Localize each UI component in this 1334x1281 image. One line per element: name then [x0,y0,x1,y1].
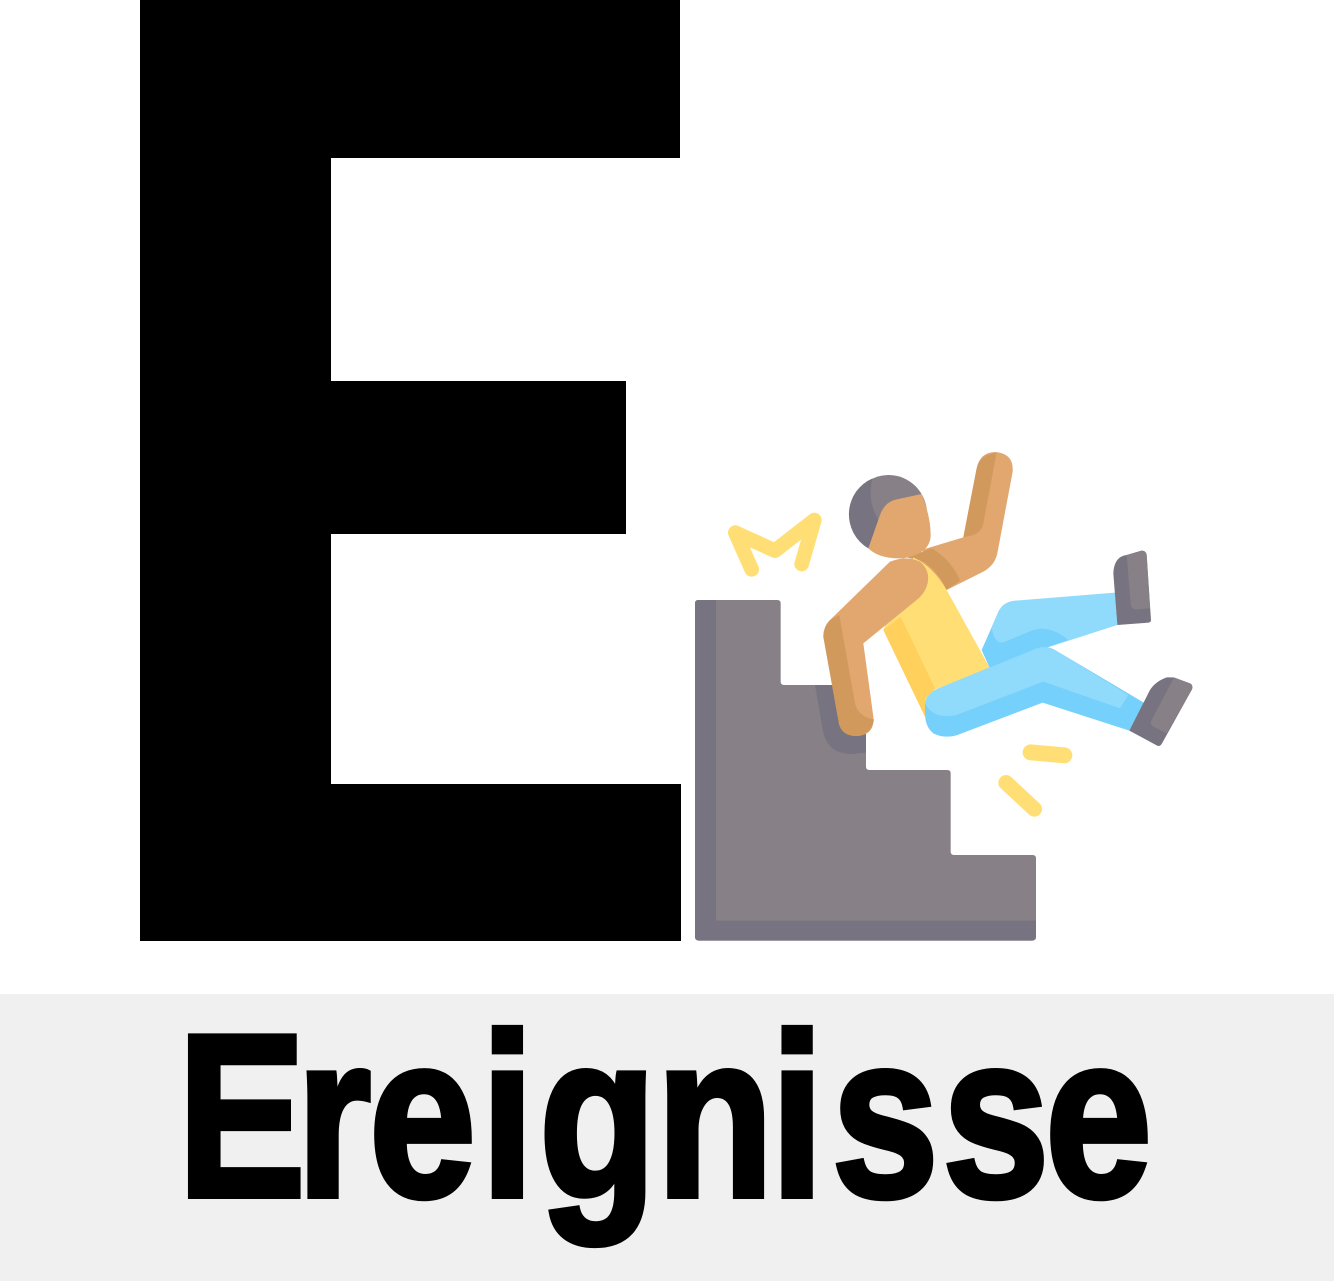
impact marks [735,520,1064,809]
raised arm [907,452,1013,590]
front leg [925,647,1145,737]
caption: Ereignisse: Ereignisse [178,987,1152,1246]
large letter E [140,0,681,941]
stairs [695,600,1036,941]
upper shoe [1113,551,1151,625]
icon: person falling down stairs [695,452,1192,941]
tank top [883,557,990,717]
lower shoe [1129,677,1192,746]
back leg [982,593,1117,668]
lowered arm [823,558,928,736]
caption band [0,994,1334,1281]
head [849,475,931,558]
